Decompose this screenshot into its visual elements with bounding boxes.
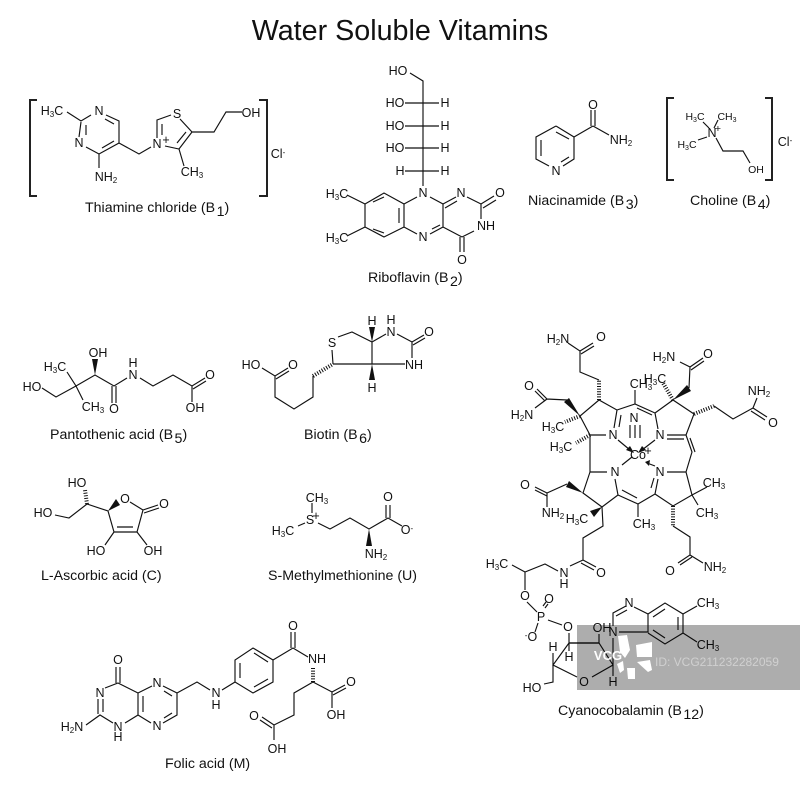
- molecule: cyanocobalamin: CH: [703, 476, 721, 490]
- molecule: riboflavin: 3: [335, 237, 340, 246]
- molecule: L-ascorbic acid: O: [120, 492, 130, 506]
- molecule: folic acid: N: [211, 686, 221, 700]
- molecule: cyanocobalamin: H: [608, 675, 618, 689]
- bonds: [698, 120, 750, 163]
- bonds: [536, 110, 609, 166]
- molecule: cyanocobalamin: H: [511, 408, 520, 422]
- atom labels: HO: [389, 64, 408, 78]
- molecule: folic acid: N: [152, 719, 162, 733]
- atom labels: C: [697, 111, 705, 123]
- caption: Niacinamide (B: [528, 193, 624, 209]
- molecule: cyanocobalamin: O: [527, 630, 537, 644]
- molecule: choline: 3: [685, 145, 689, 152]
- molecule: riboflavin: 3: [335, 193, 340, 202]
- atom labels: N: [74, 720, 83, 734]
- molecule: folic acid: O: [288, 619, 298, 633]
- molecule: thiamine chloride: S: [173, 107, 181, 121]
- molecule: S-methylmethionine: O: [401, 523, 411, 537]
- molecule: cyanocobalamin: O: [579, 675, 589, 689]
- bonds: [42, 372, 206, 403]
- molecule: cyanocobalamin: 2: [766, 390, 771, 399]
- atom labels: H: [685, 111, 693, 123]
- molecule: cyanocobalamin: 3: [714, 512, 719, 521]
- atom labels: 3: [50, 110, 55, 119]
- molecule: S-methylmethionine: 2: [383, 553, 388, 562]
- molecule: cyanocobalamin: C: [499, 557, 508, 571]
- molecule: niacinamide: NH: [610, 133, 628, 147]
- caption: S-Methylmethionine (U): [268, 568, 417, 584]
- molecule: pantothenic acid: OH: [89, 346, 107, 360]
- arrows to cobalt: [618, 440, 655, 466]
- caption: Thiamine chloride (B: [85, 200, 215, 216]
- molecule: cyanocobalamin: C: [657, 372, 666, 386]
- molecule: cyanocobalamin: N: [610, 465, 620, 479]
- molecule: thiamine chloride: Cl: [271, 147, 283, 161]
- molecule: S-methylmethionine: 3: [281, 530, 286, 539]
- brackets: [30, 100, 267, 196]
- molecule: choline: +: [715, 123, 721, 135]
- molecule: folic acid: OH: [327, 708, 345, 722]
- atom labels: 2: [556, 338, 561, 347]
- molecule: cyanocobalamin: N: [524, 408, 533, 422]
- molecule: cyanocobalamin: C: [555, 420, 564, 434]
- molecule: folic acid: [61, 619, 356, 772]
- caption: L-Ascorbic acid (C): [41, 568, 162, 584]
- molecule: choline: Cl: [778, 135, 790, 149]
- molecule: cyanocobalamin: O: [768, 416, 778, 430]
- caption: ): [182, 427, 187, 443]
- molecule: biotin: O: [288, 358, 298, 372]
- molecule: cyanocobalamin: 2: [520, 414, 525, 423]
- caption: 1: [217, 204, 225, 220]
- molecule: cyanocobalamin: O: [563, 620, 573, 634]
- molecule: riboflavin: [326, 64, 505, 290]
- molecule: riboflavin: H: [440, 141, 450, 155]
- atom labels: H: [547, 332, 556, 346]
- caption: 2: [450, 274, 458, 290]
- bonds: [262, 332, 425, 409]
- molecule: thiamine chloride: [30, 100, 286, 220]
- molecule: biotin: H: [367, 381, 377, 395]
- molecule: biotin: [242, 313, 434, 447]
- bonds: [55, 502, 159, 545]
- molecule: cyanocobalamin: 3: [495, 563, 500, 572]
- molecule: cyanocobalamin: 3: [648, 383, 653, 392]
- molecule: riboflavin: H: [440, 96, 450, 110]
- brackets: [667, 98, 772, 180]
- caption: ): [699, 703, 704, 719]
- stereo wedge: [366, 529, 372, 546]
- side chains: [535, 343, 767, 570]
- molecule: L-ascorbic acid: HO: [34, 506, 53, 520]
- molecule: riboflavin: H: [326, 231, 335, 245]
- molecule: cyanocobalamin: 2: [662, 356, 667, 365]
- molecule: L-ascorbic acid: O: [159, 497, 169, 511]
- molecule: cyanocobalamin: O: [520, 589, 530, 603]
- molecule: biotin: NH: [405, 358, 423, 372]
- molecule: cyanocobalamin: NH: [542, 506, 560, 520]
- molecule: choline: H: [677, 139, 685, 151]
- molecule: folic acid: N: [113, 720, 123, 734]
- molecule: cyanocobalamin: 3: [551, 426, 556, 435]
- molecule: cyanocobalamin: NH: [704, 560, 722, 574]
- watermark band: [577, 625, 800, 690]
- nucleotide tail bonds: [512, 564, 697, 684]
- atom labels: CH: [306, 491, 324, 505]
- molecule: choline: OH: [748, 164, 764, 176]
- molecule: cyanocobalamin: H: [542, 420, 551, 434]
- molecule: folic acid: O: [346, 675, 356, 689]
- bonds: [86, 632, 346, 740]
- caption: ): [367, 427, 372, 443]
- molecule: folic acid: H: [113, 730, 123, 744]
- molecule: S-methylmethionine: O: [383, 490, 393, 504]
- molecule: pantothenic acid: H: [44, 360, 53, 374]
- caption: ): [634, 193, 638, 209]
- caption: Choline (B: [690, 193, 756, 209]
- atom labels: N: [560, 332, 569, 346]
- caption: Biotin (B: [304, 427, 358, 443]
- corrin core bonds: [580, 400, 695, 507]
- molecule: riboflavin: N: [456, 186, 466, 200]
- bonds: [347, 73, 496, 252]
- molecule: biotin: H: [386, 313, 396, 327]
- molecule: cyanocobalamin: CH: [696, 506, 714, 520]
- molecule: cyanocobalamin: C: [579, 512, 588, 526]
- molecule: folic acid: H: [211, 698, 221, 712]
- molecule: cyanocobalamin: H: [566, 512, 575, 526]
- molecule: cyanocobalamin: CH: [697, 638, 715, 652]
- molecule: cyanocobalamin: H: [564, 650, 574, 664]
- molecule: pantothenic acid: CH: [82, 400, 100, 414]
- molecule: riboflavin: HO: [386, 96, 405, 110]
- molecule: thiamine chloride: N: [94, 104, 104, 118]
- molecule: cyanocobalamin: H: [559, 577, 569, 591]
- molecule: choline: 3: [733, 117, 737, 124]
- molecule: cyanocobalamin: O: [520, 478, 530, 492]
- molecule: choline: C: [689, 139, 697, 151]
- molecule: riboflavin: O: [495, 186, 505, 200]
- watermark logo: [594, 635, 652, 679]
- molecule: cyanocobalamin: P: [537, 610, 545, 624]
- molecule: riboflavin: N: [418, 186, 428, 200]
- molecule: cyanocobalamin: 3: [715, 644, 720, 653]
- molecule: folic acid: O: [113, 653, 123, 667]
- molecule: cyanocobalamin: O: [703, 347, 713, 361]
- molecule: pantothenic acid: 3: [53, 366, 58, 375]
- molecule: pantothenic acid: O: [205, 368, 215, 382]
- molecule: pantothenic acid: N: [128, 368, 138, 382]
- molecule: biotin: N: [386, 325, 396, 339]
- stereo hashes: [565, 380, 714, 526]
- molecule: choline: CH: [717, 111, 733, 123]
- molecule: cyanocobalamin: +: [644, 444, 652, 458]
- stereo wedges: [564, 398, 580, 416]
- caption: ): [766, 193, 770, 209]
- molecule: L-ascorbic acid: HO: [87, 544, 106, 558]
- atom labels: 3: [324, 497, 329, 506]
- molecule: pantothenic acid: 3: [100, 406, 105, 415]
- atom labels: 3: [693, 117, 697, 124]
- molecule: cyanocobalamin: O: [596, 566, 606, 580]
- molecule: cyanocobalamin: OH: [593, 621, 611, 635]
- molecule: thiamine chloride: NH: [95, 170, 113, 184]
- atom labels: HO: [68, 476, 87, 490]
- molecule: niacinamide: N: [551, 164, 561, 178]
- bonds: [298, 503, 402, 529]
- molecule: cyanocobalamin: N: [624, 596, 634, 610]
- molecule: cyanocobalamin: H: [548, 640, 558, 654]
- molecule: L-ascorbic acid: [34, 476, 169, 584]
- molecule: cyanocobalamin: C: [563, 440, 572, 454]
- molecule: cyanocobalamin: CH: [633, 517, 651, 531]
- molecule: choline: [667, 98, 793, 213]
- molecule: cyanocobalamin: NH: [748, 384, 766, 398]
- title: Water Soluble Vitamins: [252, 15, 548, 47]
- molecule: choline: N: [707, 126, 717, 140]
- molecule: cyanocobalamin: O: [544, 592, 554, 606]
- atom labels: H: [61, 720, 70, 734]
- molecule: choline: -: [790, 136, 793, 145]
- molecule: riboflavin: H: [326, 187, 335, 201]
- molecule: cyanocobalamin: N: [666, 350, 675, 364]
- molecule: niacinamide: [528, 98, 638, 213]
- molecule: riboflavin: C: [339, 187, 348, 201]
- atom labels: HO: [242, 358, 261, 372]
- molecule: cyanocobalamin: 3: [721, 482, 726, 491]
- molecule: folic acid: O: [249, 709, 259, 723]
- atom labels: HO: [23, 380, 42, 394]
- molecule: S-methylmethionine: H: [272, 524, 281, 538]
- caption: 12: [683, 707, 699, 723]
- molecule: cyanocobalamin: CH: [697, 596, 715, 610]
- molecule: riboflavin: HO: [386, 119, 405, 133]
- molecule: folic acid: NH: [308, 652, 326, 666]
- caption: 6: [359, 431, 367, 447]
- molecule: biotin: S: [328, 336, 336, 350]
- atom labels: H: [41, 104, 50, 118]
- molecule: S-methylmethionine: [268, 490, 417, 584]
- stereo wedge: [92, 359, 98, 375]
- molecule: cyanocobalamin: [486, 330, 778, 723]
- molecule: riboflavin: NH: [477, 219, 495, 233]
- caption: Cyanocobalamin (B: [558, 703, 682, 719]
- caption: ): [224, 200, 229, 216]
- molecule: cyanocobalamin: 2: [560, 512, 565, 521]
- caption: Pantothenic acid (B: [50, 427, 173, 443]
- caption: 5: [175, 431, 183, 447]
- molecule: folic acid: OH: [268, 742, 286, 756]
- molecule: thiamine chloride: 3: [199, 171, 204, 180]
- molecule: cyanocobalamin: N: [629, 411, 639, 425]
- molecule: pantothenic acid: C: [57, 360, 66, 374]
- molecule: thiamine chloride: N: [152, 137, 162, 151]
- molecule: cyanocobalamin: O: [665, 564, 675, 578]
- molecule: cyanocobalamin: O: [596, 330, 606, 344]
- bonds: [67, 112, 242, 168]
- molecule: thiamine chloride: OH: [242, 106, 260, 120]
- molecule: riboflavin: N: [418, 230, 428, 244]
- molecule: thiamine chloride: +: [162, 133, 170, 147]
- stereo bonds: [313, 364, 333, 376]
- molecule: biotin: H: [367, 314, 377, 328]
- molecule: riboflavin: C: [339, 231, 348, 245]
- molecule: riboflavin: H: [440, 164, 450, 178]
- molecule: cyanocobalamin: N: [608, 625, 618, 639]
- molecule: folic acid: N: [95, 686, 105, 700]
- molecule: cyanocobalamin: 3: [559, 446, 564, 455]
- molecule: cyanocobalamin: 2: [722, 566, 727, 575]
- molecule: riboflavin: H: [440, 119, 450, 133]
- molecule: thiamine chloride: 2: [113, 176, 118, 185]
- molecule: cyanocobalamin: H: [486, 557, 495, 571]
- molecule: riboflavin: HO: [386, 141, 405, 155]
- caption: 3: [626, 197, 634, 213]
- molecule: folic acid: N: [152, 676, 162, 690]
- molecule: cyanocobalamin: N: [655, 465, 665, 479]
- molecule: riboflavin: H: [395, 164, 405, 178]
- molecule: S-methylmethionine: -: [411, 524, 414, 533]
- molecule: cyanocobalamin: N: [608, 428, 618, 442]
- atom labels: C: [54, 104, 63, 118]
- molecule: thiamine chloride: N: [74, 136, 84, 150]
- molecule: pantothenic acid: H: [128, 356, 138, 370]
- molecule: cyanocobalamin: H: [653, 350, 662, 364]
- watermark id: ID: VCG211232282059: [655, 655, 779, 669]
- atom labels: 2: [70, 726, 75, 735]
- stereo bonds: [85, 490, 87, 504]
- molecule: cyanocobalamin: CH: [630, 377, 648, 391]
- molecule: riboflavin: O: [457, 253, 467, 267]
- molecule: S-methylmethionine: C: [285, 524, 294, 538]
- molecule: cyanocobalamin: 3: [715, 602, 720, 611]
- molecule: thiamine chloride: CH: [181, 165, 199, 179]
- molecule: cyanocobalamin: 3: [651, 523, 656, 532]
- molecule: L-ascorbic acid: OH: [144, 544, 162, 558]
- molecule: cyanocobalamin: HO: [523, 681, 542, 695]
- molecule: pantothenic acid: OH: [186, 401, 204, 415]
- molecule: cyanocobalamin: 3: [575, 518, 580, 527]
- molecule: pantothenic acid: O: [109, 402, 119, 416]
- watermark logo: VCG: [594, 648, 622, 663]
- molecule: cyanocobalamin: -: [525, 631, 528, 640]
- molecule: cyanocobalamin: O: [524, 379, 534, 393]
- atom labels: O: [588, 98, 598, 112]
- molecule: biotin: O: [424, 325, 434, 339]
- molecule: niacinamide: 2: [628, 139, 633, 148]
- molecule: cyanocobalamin: N: [655, 428, 665, 442]
- molecule: pantothenic acid: [23, 346, 215, 447]
- molecule: cyanocobalamin: H: [550, 440, 559, 454]
- molecule: cyanocobalamin: Co: [630, 448, 646, 462]
- molecule: S-methylmethionine: +: [312, 509, 320, 523]
- stereo hash: [311, 667, 315, 682]
- molecule: cyanocobalamin: N: [559, 566, 569, 580]
- caption: 4: [758, 197, 766, 213]
- molecule: S-methylmethionine: NH: [365, 547, 383, 561]
- molecule: S-methylmethionine: S: [306, 513, 314, 527]
- molecule: cyanocobalamin: 3: [653, 378, 658, 387]
- molecule: cyanocobalamin: H: [644, 372, 653, 386]
- molecule: thiamine chloride: -: [283, 148, 286, 157]
- caption: ): [458, 270, 463, 286]
- caption: Riboflavin (B: [368, 270, 448, 286]
- caption: Folic acid (M): [165, 756, 250, 772]
